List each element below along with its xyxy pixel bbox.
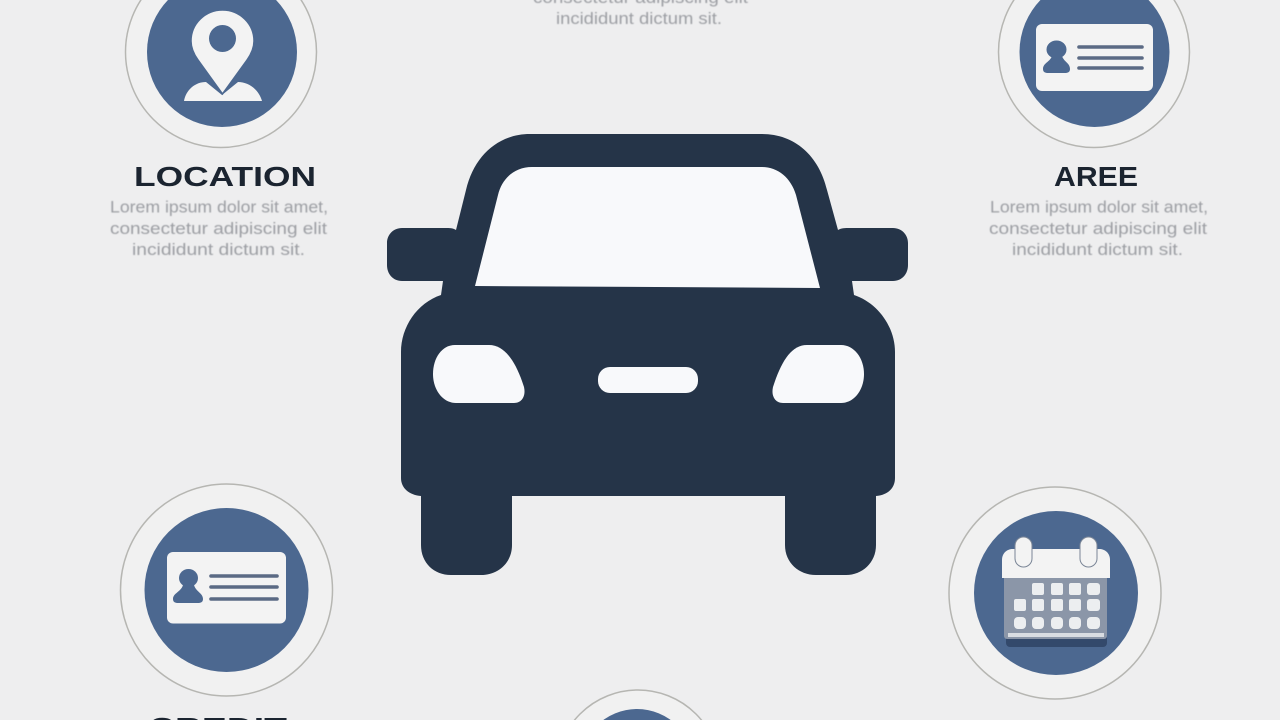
central car icon bbox=[387, 134, 908, 575]
windshield bbox=[475, 167, 820, 288]
car body bbox=[387, 134, 908, 575]
credit ring bbox=[120, 484, 332, 696]
location disc bbox=[147, 0, 297, 127]
area description: incididunt dictum sit. bbox=[1012, 240, 1183, 259]
location description: consectetur adipiscing elit bbox=[110, 219, 327, 238]
area disc bbox=[1020, 0, 1170, 127]
heading: location: LOCATION bbox=[134, 161, 316, 192]
area description bbox=[989, 198, 1208, 259]
credit disc bbox=[144, 508, 308, 672]
location description: incididunt dictum sit. bbox=[132, 240, 305, 259]
bottom ring bbox=[556, 690, 720, 720]
right headlight bbox=[772, 345, 864, 403]
location ring bbox=[126, 0, 316, 148]
panel: credit bbox=[120, 484, 332, 720]
icon: id card bbox=[167, 552, 286, 624]
icon: calendar bbox=[1002, 537, 1110, 647]
area description: consectetur adipiscing elit bbox=[989, 219, 1207, 238]
grille bbox=[598, 367, 698, 393]
location description bbox=[110, 198, 328, 259]
panel: location bbox=[110, 0, 328, 259]
area ring bbox=[998, 0, 1190, 148]
panel: bottom centre bbox=[556, 690, 720, 720]
panel: schedule bbox=[949, 487, 1161, 699]
bottom disc bbox=[580, 709, 694, 720]
heading: area: AREE bbox=[1054, 161, 1138, 192]
area description: Lorem ipsum dolor sit amet, bbox=[990, 198, 1208, 216]
left headlight bbox=[433, 345, 525, 403]
panel: area bbox=[989, 0, 1208, 259]
icon: id card bbox=[1036, 24, 1153, 91]
schedule disc bbox=[974, 511, 1138, 675]
panel: top centre text bbox=[533, 0, 748, 28]
location description: Lorem ipsum dolor sit amet, bbox=[110, 198, 328, 216]
panel: top centre text: incididunt dictum sit. bbox=[556, 9, 722, 28]
schedule ring bbox=[949, 487, 1161, 699]
icon: map pin bbox=[184, 10, 262, 101]
